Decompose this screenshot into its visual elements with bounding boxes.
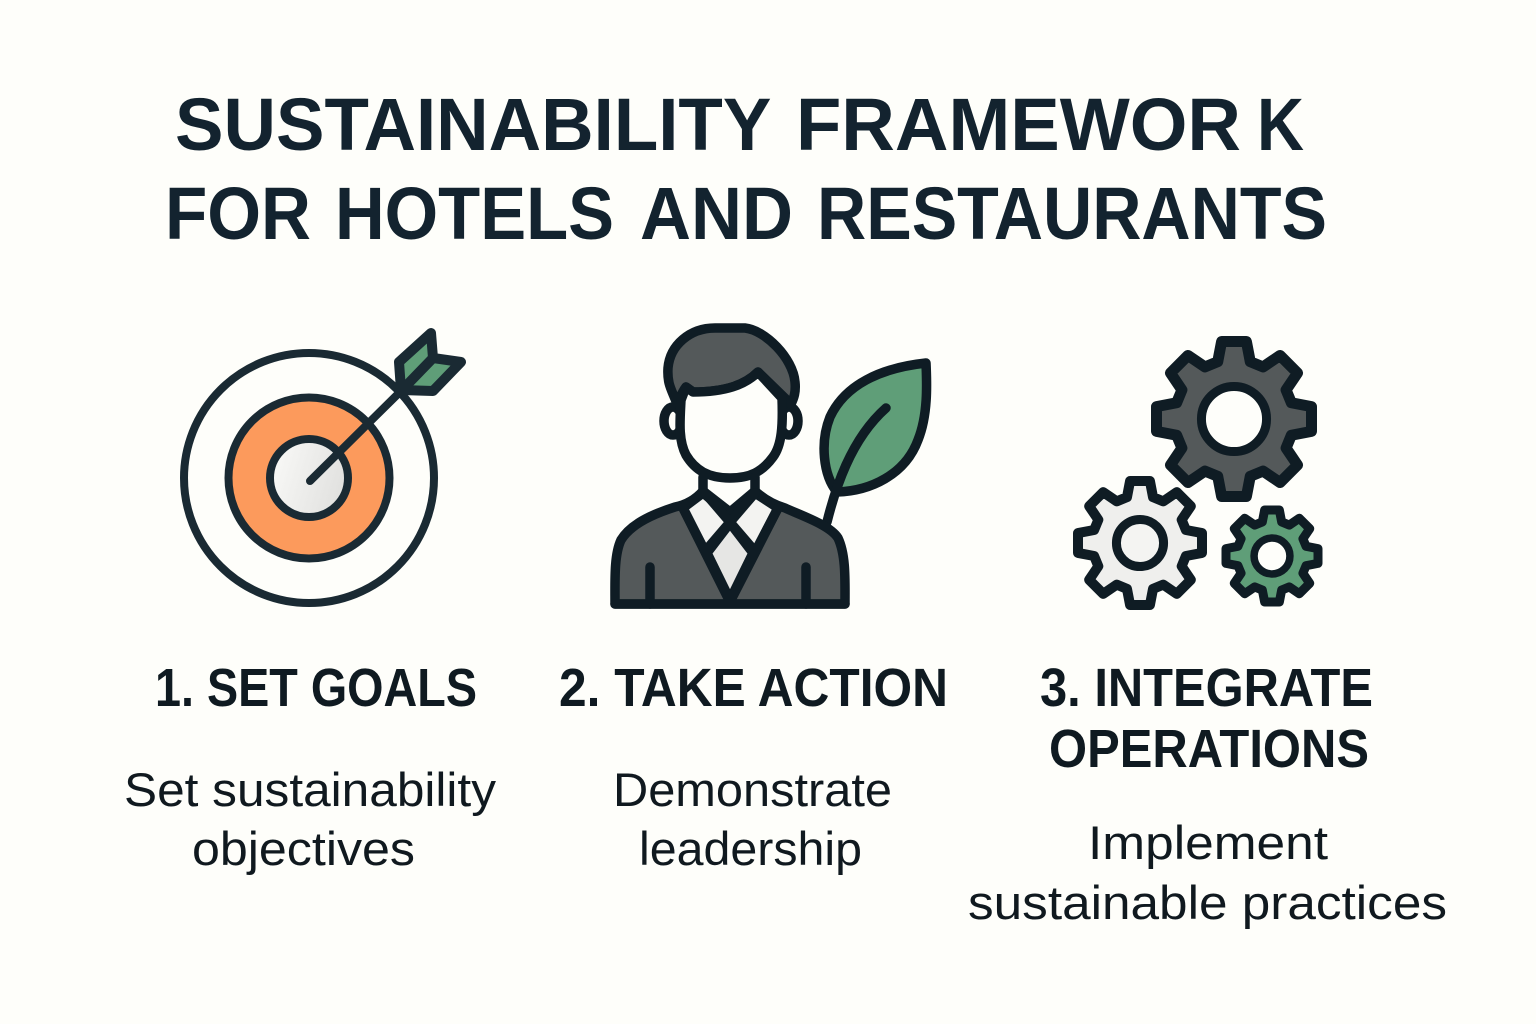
step 2: take action: 2. TAKE ACTION bbox=[559, 658, 948, 718]
title: FOR bbox=[165, 172, 311, 255]
jacket bbox=[615, 491, 845, 604]
step 1: set goals: objectives bbox=[192, 822, 415, 875]
tie bbox=[707, 523, 753, 600]
step 2: take action: leadership bbox=[639, 822, 862, 875]
title: K bbox=[1257, 83, 1304, 166]
step 3: integrate operations: 3. INTEGRATE bbox=[1040, 658, 1373, 718]
title: HOTELS bbox=[335, 172, 614, 255]
title: SUSTAINABILITY bbox=[175, 83, 771, 166]
step 2: take action bbox=[559, 658, 948, 875]
title: RESTAURANTS bbox=[817, 172, 1327, 255]
white gear bbox=[1078, 481, 1202, 605]
large dark gear bbox=[1156, 342, 1312, 496]
step 3: integrate operations: sustainable practices bbox=[968, 876, 1447, 929]
icon: three gears bbox=[1078, 342, 1318, 605]
ears bbox=[664, 407, 798, 435]
step 3: integrate operations: Implement bbox=[1088, 816, 1328, 869]
leaf bbox=[824, 363, 927, 522]
step 2: take action: Demonstrate bbox=[613, 763, 892, 816]
lapel lines bbox=[683, 493, 778, 602]
title bbox=[165, 83, 1327, 255]
neck bbox=[703, 477, 755, 491]
hair bbox=[668, 328, 795, 404]
title: FRAMEWOR bbox=[796, 83, 1241, 166]
face bbox=[680, 372, 782, 478]
shirt collar bbox=[683, 493, 778, 600]
icon: target with arrow bbox=[184, 333, 461, 603]
step 1: set goals: 1. SET GOALS bbox=[155, 658, 477, 718]
step 3: integrate operations bbox=[968, 658, 1447, 929]
title: AND bbox=[640, 172, 793, 255]
green gear bbox=[1226, 510, 1318, 602]
icon: person with leaf bbox=[615, 328, 927, 604]
step 3: integrate operations: OPERATIONS bbox=[1049, 719, 1369, 779]
step 1: set goals bbox=[124, 658, 497, 875]
step 1: set goals: Set sustainability bbox=[124, 763, 497, 816]
arm lines bbox=[650, 567, 806, 604]
